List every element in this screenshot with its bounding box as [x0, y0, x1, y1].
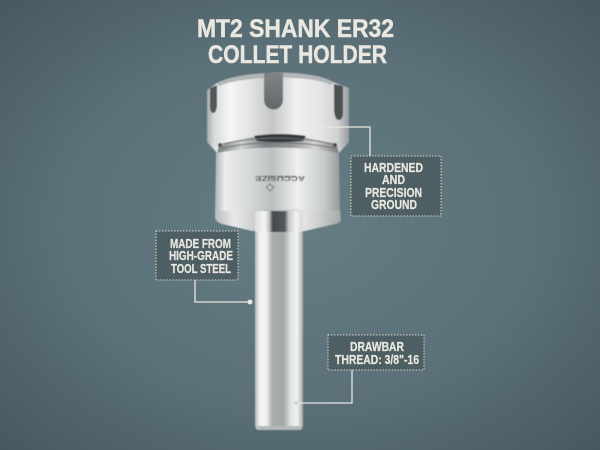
label text: MADE FROM [170, 237, 231, 251]
leader dot [294, 401, 298, 405]
callout: hardened and precision ground [314, 125, 441, 216]
label text: DRAWBAR [350, 340, 404, 354]
label text [364, 161, 423, 212]
shank chamfer [256, 426, 302, 430]
engraved brand: ACCUSIZE [255, 174, 305, 181]
label text: AND [382, 173, 405, 187]
collet holder tool [207, 73, 349, 430]
label text: HIGH-GRADE [169, 249, 233, 263]
label text: THREAD: 3/8"-16 [335, 353, 419, 367]
callout: drawbar thread [294, 335, 424, 405]
nut top ridge [217, 73, 333, 86]
neck front [255, 211, 303, 232]
shank [255, 228, 303, 430]
leader dot [314, 125, 318, 129]
label text: PRECISION [365, 186, 422, 200]
dark groove band [254, 134, 306, 142]
label box [351, 156, 441, 216]
label text: GROUND [371, 198, 417, 212]
leader line [316, 127, 370, 156]
collet nut [207, 73, 349, 153]
groove ring [217, 135, 339, 154]
title: COLLET HOLDER [208, 41, 387, 69]
nut slots [264, 73, 283, 110]
label text: HARDENED [364, 161, 423, 175]
title: MT2 SHANK ER32 [197, 15, 394, 43]
label text [169, 237, 233, 276]
thread lines [222, 138, 334, 148]
engraved brand: INDUSTRIAL TOOLS [265, 174, 295, 180]
body flare [215, 209, 341, 231]
body [215, 148, 340, 212]
leader dot [248, 300, 252, 304]
label box [156, 231, 238, 280]
title [197, 15, 394, 69]
label text: TOOL STEEL [171, 262, 231, 276]
label box [328, 335, 424, 370]
callout: made from high-grade tool steel [156, 231, 252, 304]
label text [335, 340, 419, 367]
thread dots [218, 143, 337, 147]
leader line [296, 370, 352, 403]
leader line [195, 280, 250, 302]
engraved brand [255, 174, 305, 191]
